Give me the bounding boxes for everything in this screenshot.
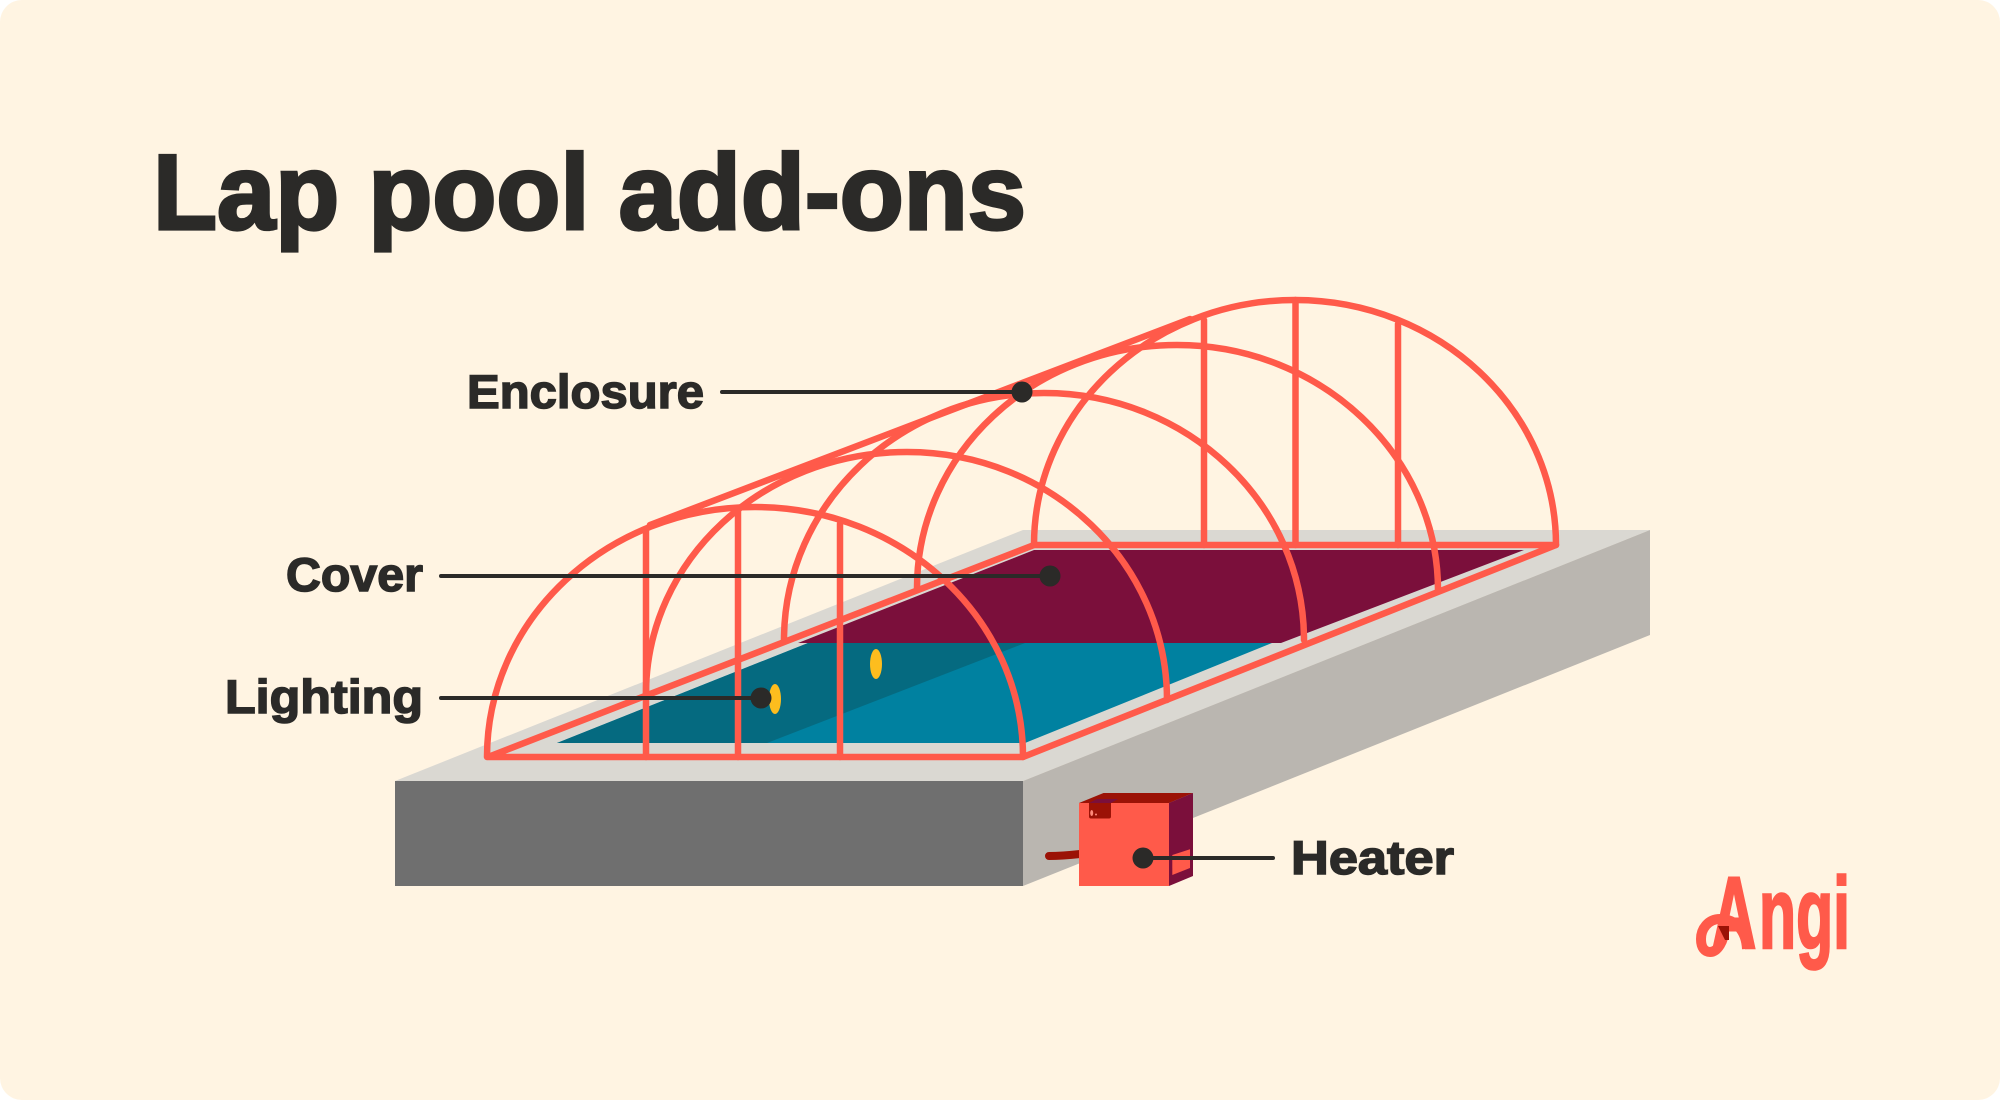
pool cover bbox=[798, 550, 1524, 643]
pool water bbox=[557, 643, 1272, 743]
callout: lighting bbox=[225, 670, 772, 723]
callout: enclosure: Enclosure bbox=[467, 365, 704, 418]
callout: cover: Cover bbox=[286, 548, 423, 601]
callout: lighting: Lighting bbox=[225, 670, 423, 723]
heater bbox=[1049, 793, 1193, 886]
Angi logo: ngi bbox=[1759, 858, 1850, 970]
title: Lap pool add-ons bbox=[153, 132, 1026, 252]
callout: heater bbox=[1132, 831, 1454, 884]
Angi logo: A bbox=[1712, 858, 1756, 970]
concrete pool slab bbox=[395, 530, 1650, 886]
callout: cover bbox=[286, 548, 1060, 601]
callout: enclosure bbox=[467, 365, 1032, 418]
callout: heater: Heater bbox=[1291, 831, 1454, 884]
Angi logo bbox=[1701, 858, 1850, 970]
enclosure frame bbox=[487, 300, 1556, 757]
pool lighting bbox=[769, 649, 882, 714]
